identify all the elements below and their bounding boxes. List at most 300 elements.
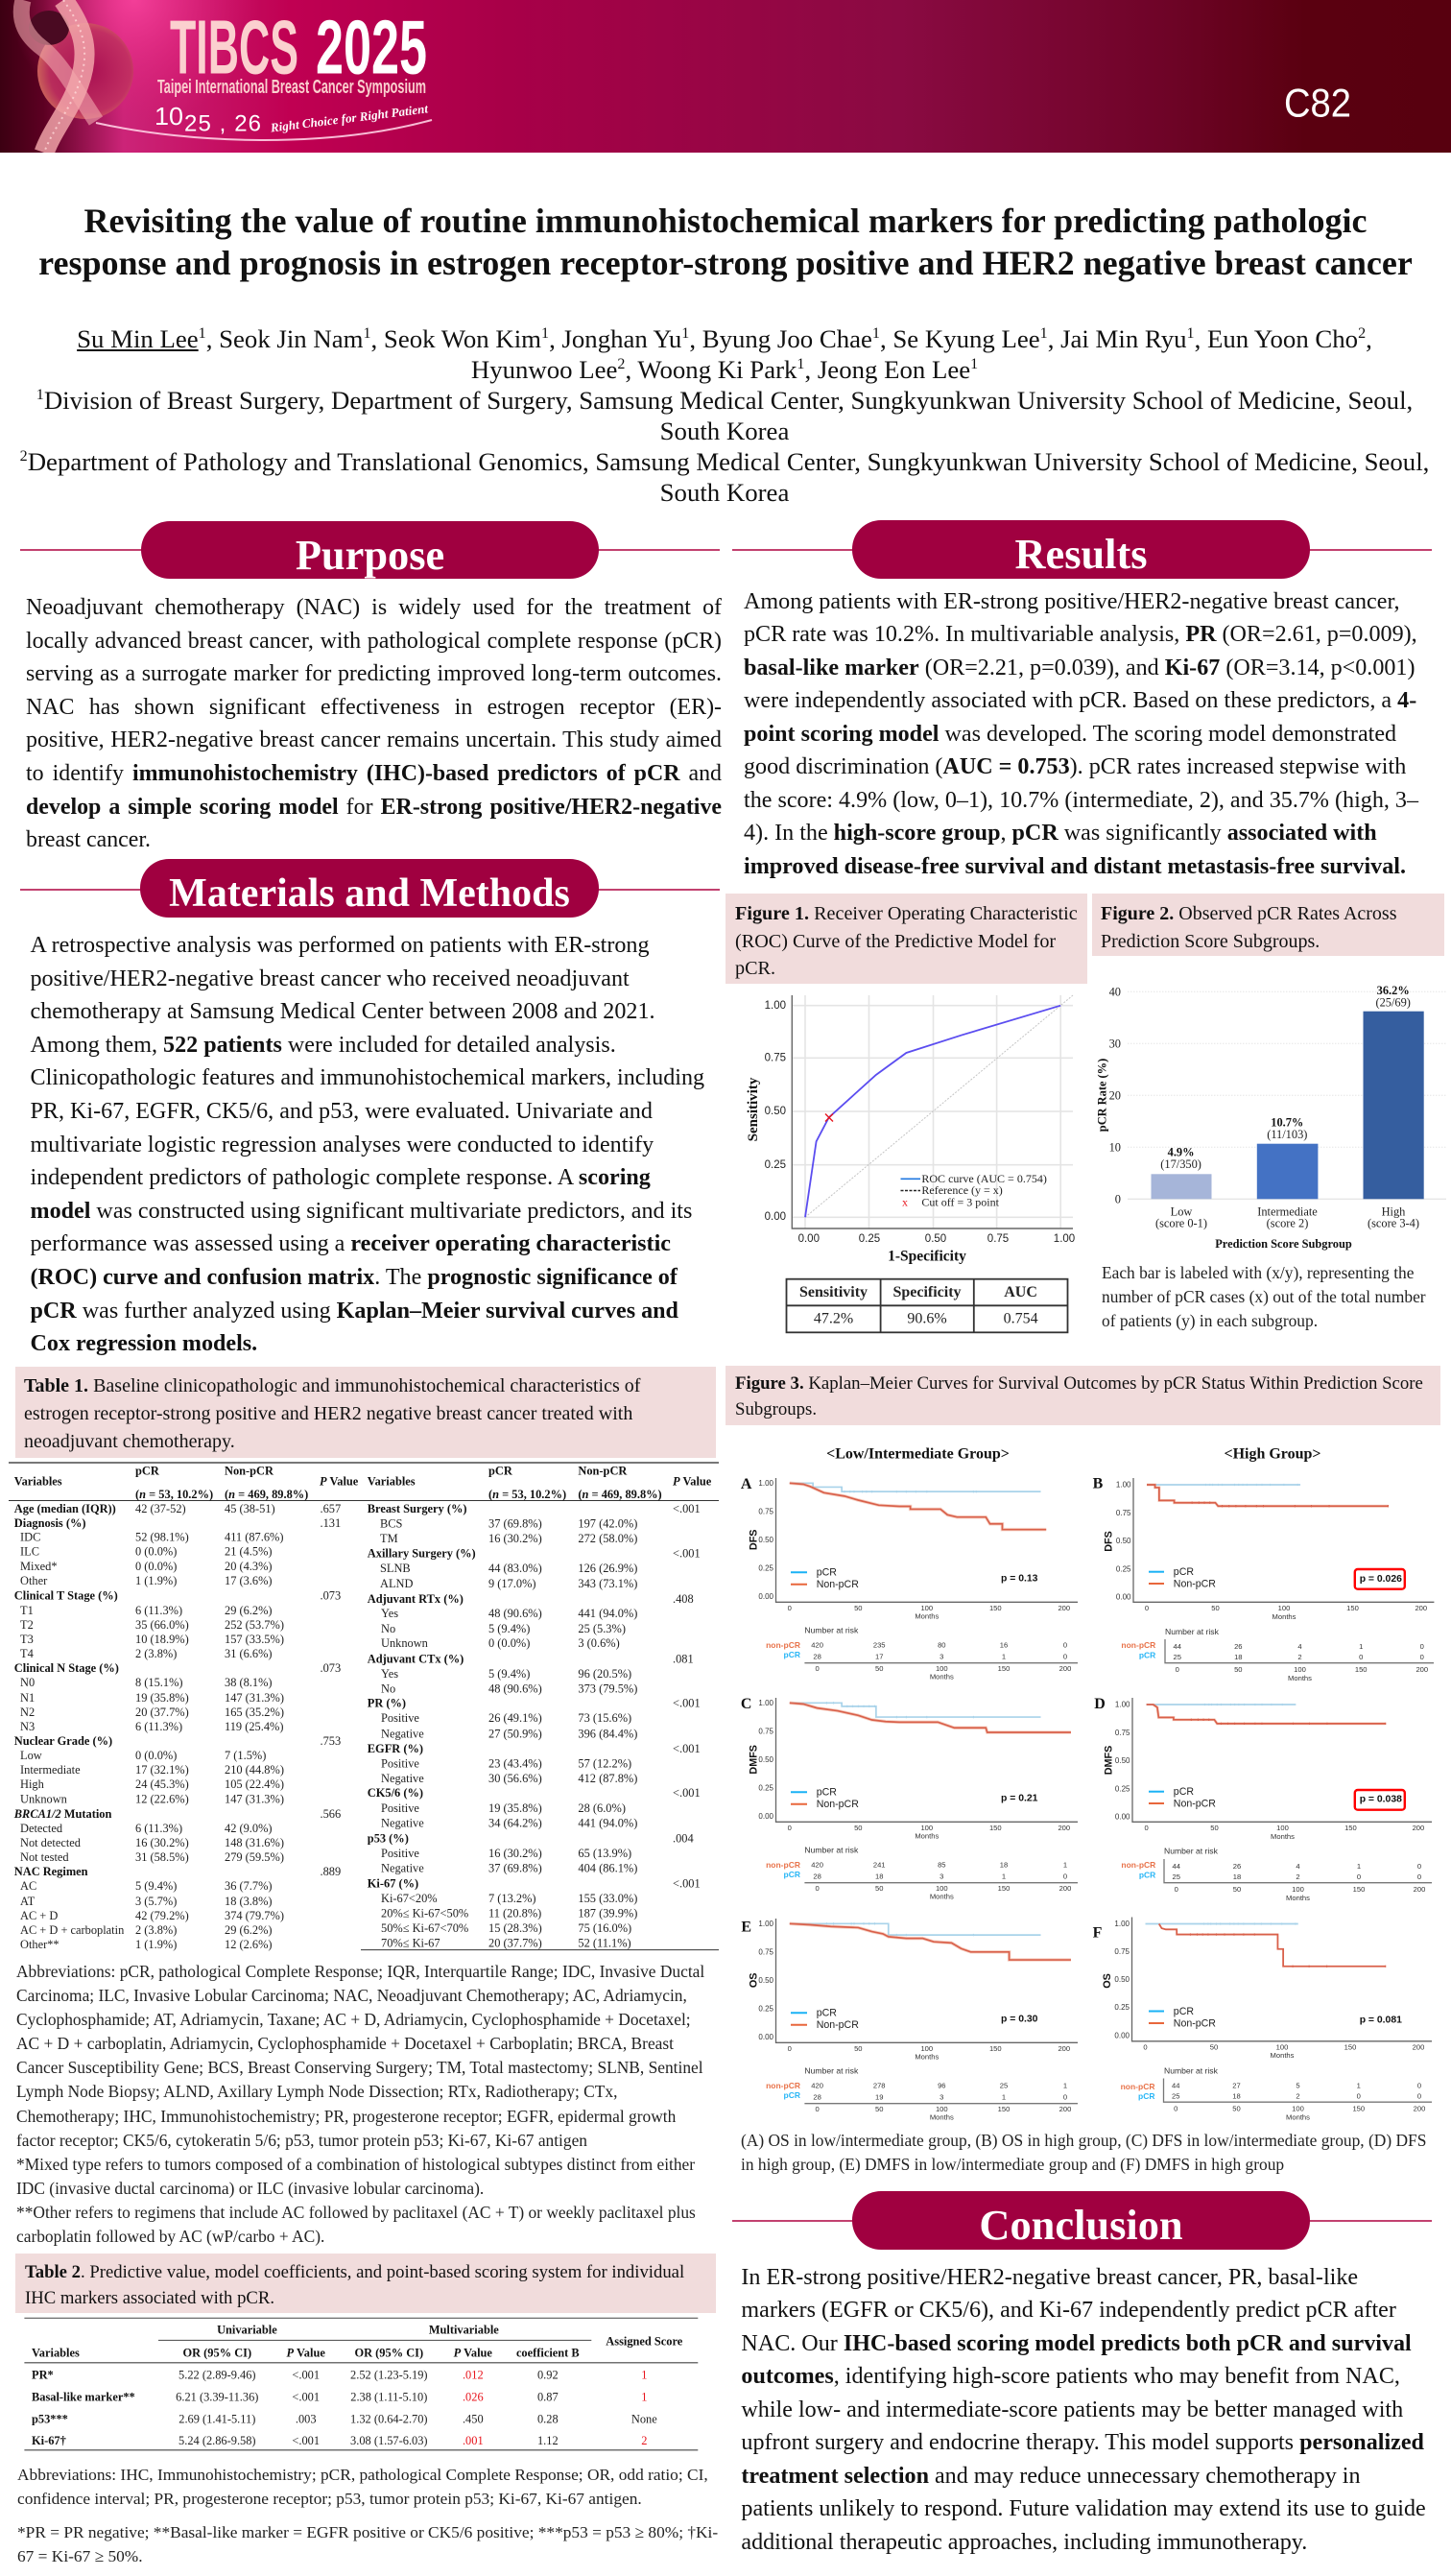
number at risk: non-pCR [766, 2081, 800, 2090]
number at risk: 200 [1059, 1664, 1071, 1673]
number at risk: 200 [1414, 2104, 1425, 2112]
number at risk: 278 [873, 2081, 886, 2090]
table 1: baseline characteristics: 9 (17.0%) [488, 1577, 536, 1590]
table 1: baseline characteristics: 44 (83.0%) [488, 1562, 542, 1575]
caption: Figure 3: Figure 3. Kaplan–Meier Curves for Survival Outcomes by pCR Status Within Prediction Score [735, 1373, 1423, 1394]
table 1: baseline characteristics: 6 (11.3%) [135, 1720, 182, 1733]
table 1: baseline characteristics: p53 (%) [368, 1831, 409, 1845]
table 1: baseline characteristics [9, 1463, 719, 1951]
table 1: baseline characteristics: AT [20, 1895, 36, 1908]
table 2: scoring system: Multivariable [429, 2324, 499, 2337]
number at risk: Months [1286, 1894, 1310, 1902]
number at risk: 44 [1172, 2081, 1179, 2090]
table 2: scoring system: 2.38 (1.11-5.10) [350, 2391, 427, 2404]
table 1: baseline characteristics: 57 (12.2%) [578, 1756, 631, 1770]
table 1: baseline characteristics: Intermediate [20, 1763, 81, 1777]
table 1: baseline characteristics: 374 (79.7%) [225, 1909, 284, 1922]
panel C: DMFS low/intermediate [741, 1696, 1078, 1900]
text: Results: 4). In the high-score group, pCR was significantly associated with [744, 821, 1377, 846]
chart: observed pCR rates: (11/103) [1267, 1128, 1307, 1141]
text: Purpose: to identify immunohistochemistry (IHC)-based predictors of pCR and [26, 761, 722, 786]
number at risk: 50 [875, 1884, 883, 1893]
panel E: OS low/intermediate: 150 [989, 2044, 1002, 2053]
table 1: baseline characteristics: Negative [381, 1862, 424, 1875]
panel D: DMFS high: 100 [1276, 1824, 1289, 1832]
text: Results: point scoring model was developed. The scoring model demonstrated [744, 722, 1396, 747]
table 1: baseline characteristics: N2 [20, 1705, 35, 1719]
table 1: baseline characteristics: ( [578, 1488, 583, 1501]
table 2: scoring system: p53*** [32, 2413, 68, 2426]
number at risk: Number at risk [1164, 1847, 1219, 1856]
text: Conclusion: upfront surgery and endocrine therapy. This model supports personalized [741, 2430, 1424, 2455]
text: Purpose: develop a simple scoring model for ER-strong positive/HER2-negative [26, 795, 722, 820]
panel A: DFS low/intermediate: 1.00 [758, 1479, 774, 1488]
caption: Table 2: Table 2. Predictive value, model coefficients, and point-based scoring system for individual [25, 2262, 684, 2282]
table 1: baseline characteristics: 272 (58.0%) [578, 1532, 637, 1545]
chart: observed pCR rates: 10 [1109, 1140, 1121, 1154]
text: Results: good discrimination (AUC = 0.753). pCR rates increased stepwise with [744, 754, 1406, 779]
number at risk: 19 [875, 2092, 883, 2102]
panel C: DMFS low/intermediate: 150 [989, 1824, 1002, 1832]
table 1: baseline characteristics: 65 (13.9%) [578, 1847, 631, 1860]
caption: Figure 1: pCR. [735, 958, 775, 979]
chart: ROC curve: 1.00 [765, 1000, 786, 1012]
chart: observed pCR rates: (score 3-4) [1368, 1217, 1419, 1230]
table 1: baseline characteristics: 25 (5.3%) [578, 1622, 626, 1635]
panel D: DMFS high: DMFS [1104, 1746, 1115, 1775]
legend [1149, 2006, 1216, 2029]
panel C: DMFS low/intermediate: 0.25 [758, 1783, 774, 1792]
table 1: baseline characteristics: Not tested [20, 1850, 69, 1864]
number at risk: Number at risk [804, 1626, 859, 1635]
number at risk: 200 [1415, 1665, 1428, 1674]
number at risk: 0 [1063, 1653, 1067, 1660]
number at risk: 0 [1174, 2104, 1177, 2112]
table 2: scoring system: 0.87 [537, 2391, 559, 2404]
panel B: DFS high: 0.75 [1116, 1509, 1131, 1517]
number at risk: 0 [815, 1884, 820, 1893]
text: Figure 2 note [1102, 1263, 1426, 1330]
table 1: baseline characteristics: Axillary Surgery (%) [368, 1547, 476, 1561]
text: Table 1 abbreviations: Chemotherapy; IHC, Immunohistochemistry; PR, progesterone receptor; EGFR, epidermal growth [16, 2107, 676, 2126]
text: Conclusion [979, 2201, 1183, 2249]
number at risk: 50 [1233, 1885, 1241, 1894]
caption: Figure 1: (ROC) Curve of the Predictive Model for [735, 931, 1056, 952]
number at risk: pCR [784, 1650, 800, 1659]
table 1: baseline characteristics: 0 (0.0%) [135, 1560, 177, 1573]
significant p value: p = 0.026 [1360, 1574, 1402, 1585]
chart: observed pCR rates: 0 [1115, 1192, 1121, 1205]
panel C: DMFS low/intermediate: 1.00 [758, 1699, 774, 1707]
panel F: OS high: 100 [1276, 2043, 1288, 2052]
number at risk: 27 [1232, 2081, 1241, 2090]
table 1: baseline characteristics: 19 (35.8%) [135, 1691, 189, 1705]
table 2: scoring system [24, 2318, 698, 2450]
number at risk: pCR [1139, 1650, 1155, 1659]
panel A: DFS low/intermediate: 0.25 [758, 1563, 774, 1572]
text: Conclusion: markers (EGFR or CK5/6), and Ki-67 independently predict pCR after [741, 2298, 1396, 2323]
caption: Table 1: Table 1. Baseline clinicopathologic and immunohistochemical characteristics of [24, 1375, 640, 1396]
number at risk [1121, 1627, 1434, 1682]
text: Conclusion: patients unlikely to respond. Future validation may extend its use to guide [741, 2496, 1426, 2521]
panel A: DFS low/intermediate: 150 [989, 1604, 1002, 1612]
table 1: baseline characteristics: Clinical T Stage (%) [14, 1589, 118, 1603]
table 1: baseline characteristics: 126 (26.9%) [578, 1562, 637, 1575]
authors and affiliations: 1Division of Breast Surgery, Department of Surgery, Samsung Medical Center, Sungkyunkwan University School of Medicine, Seoul, [36, 386, 1413, 415]
number at risk: 1 [1002, 1653, 1006, 1660]
number at risk [766, 1846, 1078, 1900]
table 2: scoring system: P Value [454, 2346, 492, 2359]
chart: observed pCR rates: 36.2% [1377, 984, 1410, 997]
text: Purpose: breast cancer. [26, 827, 151, 852]
legend: Non-pCR [817, 2019, 859, 2031]
number at risk: Number at risk [804, 2066, 859, 2076]
text: Figure 2 note: number of pCR cases (x) out of the total number [1102, 1287, 1426, 1306]
chart: observed pCR rates: 10.7% [1271, 1116, 1303, 1130]
table: ROC performance: 47.2% [814, 1311, 853, 1326]
text: Results: basal-like marker (OR=2.21, p=0.039), and Ki-67 (OR=3.14, p<0.001) [744, 656, 1415, 680]
number at risk: 0 [1357, 1872, 1361, 1881]
table 1: baseline characteristics: 50%≤ Ki-67<70% [381, 1921, 468, 1935]
title [38, 202, 1413, 282]
text: Table 2 footnote: *PR = PR negative; **Basal-like marker = EGFR positive or CK5/6 positive; ***p53 = p53 ≥ 80%; †Ki- [17, 2523, 718, 2541]
panel B: DFS high: 200 [1415, 1604, 1427, 1612]
chart: observed pCR rates: pCR Rate (%) [1095, 1059, 1108, 1132]
table 1: baseline characteristics: 105 (22.4%) [225, 1777, 284, 1791]
number at risk: 150 [1352, 2104, 1365, 2112]
icon: globe [37, 23, 133, 119]
significant p value [1355, 1790, 1405, 1810]
number at risk: 200 [1414, 1885, 1425, 1894]
text: Table 1 abbreviations [16, 1962, 704, 2246]
table 1: baseline characteristics: Positive [381, 1847, 419, 1860]
number at risk: 100 [1292, 2104, 1304, 2112]
number at risk: 28 [813, 1872, 821, 1881]
number at risk: 3 [940, 2092, 943, 2102]
panel C: DMFS low/intermediate: DMFS [749, 1745, 760, 1775]
table 1: baseline characteristics: Negative [381, 1772, 424, 1785]
table 2: scoring system: 1.12 [537, 2434, 559, 2447]
table 1: baseline characteristics: .004 [673, 1831, 694, 1845]
chart: ROC curve: 1-Specificity [888, 1248, 966, 1265]
table: ROC performance [787, 1279, 1067, 1332]
text: Figure 3 legend [741, 2131, 1426, 2174]
number at risk: Months [930, 2113, 954, 2121]
number at risk: 100 [1294, 1665, 1306, 1674]
number at risk [766, 1626, 1078, 1682]
table 1: baseline characteristics: n = 469, 89.8%) [583, 1488, 662, 1501]
table 1: baseline characteristics: 252 (53.7%) [225, 1618, 284, 1632]
logo text: 10 [155, 102, 183, 131]
table 1: baseline characteristics: Breast Surgery (%) [368, 1502, 467, 1515]
chart: ROC curve: 0.25 [765, 1159, 786, 1171]
table 1: baseline characteristics: 412 (87.8%) [578, 1772, 637, 1785]
number at risk: non-pCR [1121, 1640, 1155, 1650]
text: Table 1 abbreviations: IDC (invasive ductal carcinoma) or ILC (invasive lobular carcinoma). [16, 2179, 484, 2198]
caption: Figure 3 [726, 1366, 1440, 1425]
text: Conclusion: In ER-strong positive/HER2-negative breast cancer, PR, basal-like [741, 2265, 1358, 2290]
panel F: OS high [1093, 1918, 1432, 2122]
number at risk: 1 [1357, 2081, 1361, 2090]
number at risk: 200 [1059, 1884, 1071, 1893]
text: Table 2 footnote: 67 = Ki-67 ≥ 50%. [17, 2547, 143, 2565]
table 2: scoring system: 2.52 (1.23-5.19) [350, 2369, 428, 2382]
chart: ROC curve: 0.00 [798, 1233, 820, 1245]
text: Materials and Methods: A retrospective analysis was performed on patients with ER-strong [31, 933, 650, 958]
text: Purpose: positive, HER2-negative breast cancer remains uncertain. This study aimed [26, 727, 722, 752]
table 1: baseline characteristics: 0 (0.0%) [135, 1545, 177, 1559]
text: Results [744, 589, 1418, 879]
panel A: DFS low/intermediate: 50 [854, 1604, 863, 1612]
number at risk: non-pCR [766, 1860, 800, 1870]
number at risk: 18 [1233, 1872, 1241, 1881]
table 1: baseline characteristics: 37 (69.8%) [488, 1517, 542, 1531]
panel E: OS low/intermediate: OS [749, 1972, 760, 1988]
number at risk: 18 [1234, 1653, 1243, 1661]
panel E: OS low/intermediate: 0.50 [758, 1976, 774, 1985]
number at risk: Months [930, 1893, 954, 1900]
table 2: scoring system: <.001 [292, 2369, 320, 2382]
panel D: DMFS high: D [1094, 1696, 1106, 1712]
legend [791, 2008, 859, 2031]
number at risk: 0 [1357, 2092, 1361, 2101]
number at risk: 420 [811, 2081, 823, 2090]
table 1: baseline characteristics: 210 (44.8%) [225, 1763, 284, 1777]
table 1: baseline characteristics: 5 (9.4%) [488, 1622, 530, 1635]
panel F: OS high: 0.00 [1114, 2031, 1130, 2040]
caption: Table 2 [15, 2254, 716, 2313]
text: Results [1014, 530, 1148, 578]
table 1: baseline characteristics: 73 (15.6%) [578, 1711, 631, 1725]
text: Materials and Methods: chemotherapy at Samsung Medical Center between 2008 and 2021. [31, 999, 655, 1024]
legend [791, 1566, 859, 1590]
table 2: scoring system: Variables [32, 2346, 80, 2359]
panel C: DMFS low/intermediate: 0 [788, 1824, 792, 1832]
table 1: baseline characteristics: 29 (6.2%) [225, 1923, 273, 1937]
panel B: DFS high: Months [1273, 1612, 1296, 1621]
table 1: baseline characteristics: 10 (18.9%) [135, 1633, 189, 1646]
table 1: baseline characteristics: .889 [321, 1865, 341, 1878]
table 1: baseline characteristics: 75 (16.0%) [578, 1921, 631, 1935]
chart: ROC curve: 0.50 [925, 1233, 946, 1245]
text: Materials and Methods: performance was assessed using a receiver operating characteristic [31, 1231, 671, 1256]
number at risk: Number at risk [804, 1846, 859, 1855]
chart: observed pCR rates [1095, 984, 1446, 1251]
panel F: OS high: 200 [1413, 2043, 1424, 2052]
caption: Figure 2 [1092, 894, 1444, 956]
number at risk: 150 [998, 1664, 1010, 1673]
table 1: baseline characteristics: .566 [321, 1807, 341, 1821]
number at risk: 5 [1296, 2081, 1300, 2090]
legend [1149, 1566, 1216, 1589]
chart: ROC curve: 0.00 [765, 1211, 786, 1223]
number at risk: 2 [1297, 1653, 1302, 1661]
chart: observed pCR rates: Low [1171, 1205, 1192, 1218]
number at risk: 50 [1234, 1665, 1243, 1674]
table 1: baseline characteristics: 16 (30.2%) [135, 1836, 189, 1849]
panel D: DMFS high: 0.75 [1115, 1729, 1130, 1737]
ROC legend: Cut off = 3 point [921, 1195, 1000, 1208]
table 1: baseline characteristics: 48 (90.6%) [488, 1682, 542, 1695]
table 1: baseline characteristics: 1 (1.9%) [135, 1574, 177, 1587]
table 1: baseline characteristics: Adjuvant RTx (%) [368, 1592, 464, 1606]
table 1: baseline characteristics: T4 [20, 1647, 34, 1660]
panel E: OS low/intermediate [741, 1919, 1078, 2121]
text: Purpose: Neoadjuvant chemotherapy (NAC) is widely used for the treatment of [26, 595, 722, 620]
authors and affiliations: South Korea [660, 478, 789, 507]
text: Materials and Methods: Clinicopathologic features and immunohistochemical markers, including [31, 1065, 704, 1090]
number at risk: 150 [998, 2105, 1010, 2113]
table 1: baseline characteristics: 0 (0.0%) [488, 1636, 530, 1650]
table 1: baseline characteristics: Detected [20, 1822, 63, 1835]
swoosh [96, 120, 432, 140]
number at risk: 25 [1172, 1872, 1180, 1881]
table 1: baseline characteristics: <.001 [673, 1547, 701, 1561]
number at risk: Number at risk [1164, 2065, 1219, 2075]
table 1: baseline characteristics: .073 [321, 1589, 341, 1603]
number at risk: non-pCR [766, 1640, 800, 1650]
table 1: baseline characteristics: Ki-67 (%) [368, 1876, 418, 1890]
panel D: DMFS high: 1.00 [1115, 1701, 1130, 1708]
table 2: scoring system: 1 [641, 2391, 647, 2404]
panel E: OS low/intermediate: 1.00 [758, 1920, 774, 1928]
panel F: OS high: 1.00 [1114, 1920, 1130, 1928]
panel F: OS high: 0 [1143, 2043, 1148, 2052]
panel D: DMFS high [1094, 1696, 1432, 1902]
table 1: baseline characteristics: AC + D + carboplatin [20, 1923, 124, 1937]
table 1: baseline characteristics: Other** [20, 1938, 59, 1951]
panel D: DMFS high: 200 [1413, 1824, 1424, 1832]
logo text [155, 4, 429, 136]
table 1: baseline characteristics: 20 (4.3%) [225, 1560, 273, 1573]
title: Revisiting the value of routine immunohistochemical markers for predicting pathologic [84, 202, 1367, 240]
table 1: baseline characteristics: No [381, 1622, 395, 1635]
logo text: 25 , 26 [184, 111, 261, 136]
table 1: baseline characteristics: 20%≤ Ki-67<50% [381, 1906, 468, 1920]
table 1: baseline characteristics: Age (median (IQR)) [14, 1502, 116, 1515]
panel E: OS low/intermediate: 200 [1058, 2044, 1070, 2053]
table 2: scoring system: 1.32 (0.64-2.70) [350, 2413, 428, 2426]
table 1: baseline characteristics: 52 (11.1%) [578, 1937, 631, 1950]
legend [791, 1787, 859, 1810]
text: Table 1 abbreviations: Cyclophosphamide; AT, Adriamycin, Taxane; AC + D, Adriamycin, Cyclophosphamide + Docetaxel; [16, 2010, 691, 2029]
table 2: scoring system: .450 [463, 2413, 484, 2426]
table 1: baseline characteristics: ILC [20, 1545, 39, 1559]
number at risk: 50 [1232, 2104, 1241, 2112]
poster number: C82 [1284, 81, 1351, 125]
text: Results: the score: 4.9% (low, 0–1), 10.7% (intermediate, 2), and 35.7% (high, 3– [744, 788, 1418, 813]
table 1: baseline characteristics: 17 (32.1%) [135, 1763, 189, 1777]
table 1: baseline characteristics: 396 (84.4%) [578, 1727, 637, 1740]
text: Table 2 abbreviations [17, 2466, 708, 2508]
legend: pCR [1174, 2006, 1194, 2017]
chart: ROC curve [746, 995, 1075, 1265]
number at risk: 0 [1417, 2081, 1421, 2090]
text: Table 1 abbreviations: Abbreviations: pCR, pathological Complete Response; IQR, Interquartile Range; IDC, Invasive Ductal [16, 1962, 704, 1981]
text: Table 1 abbreviations: Lymph Node Biopsy; ALND, Axillary Lymph Node Dissection; RTx, Radiotherapy; CTx, [16, 2082, 617, 2101]
number at risk: 17 [875, 1653, 883, 1660]
table 1: baseline characteristics: 42 (9.0%) [225, 1822, 273, 1835]
text: Table 1 abbreviations: Carcinoma; ILC, Invasive Lobular Carcinoma; NAC, Neoadjuvant Chemotherapy; AC, Adriamycin, [16, 1986, 687, 2005]
text: Conclusion [741, 2265, 1426, 2555]
panel E: OS low/intermediate: 0.75 [758, 1947, 774, 1956]
table 1: baseline characteristics: ( [488, 1488, 492, 1501]
panel B: DFS high: B [1093, 1476, 1104, 1491]
legend: Non-pCR [817, 1799, 859, 1810]
table 1: baseline characteristics: 441 (94.0%) [578, 1817, 637, 1830]
number at risk: 85 [938, 1860, 946, 1870]
table 1: baseline characteristics: 373 (79.5%) [578, 1682, 637, 1695]
number at risk: 25 [1000, 2081, 1008, 2090]
table 2: scoring system: OR (95% CI) [183, 2346, 251, 2359]
number at risk: 0 [815, 1664, 820, 1673]
table 1: baseline characteristics: 45 (38-51) [225, 1502, 275, 1515]
table 2: scoring system: P Value [287, 2346, 325, 2359]
text: Conclusion: additional therapeutic approaches, including immunotherapy. [741, 2530, 1307, 2555]
table 1: baseline characteristics: .657 [321, 1502, 341, 1515]
table 1: baseline characteristics: P [320, 1475, 327, 1489]
table 1: baseline characteristics: ( [225, 1488, 228, 1501]
table 1: baseline characteristics: Clinical N Stage (%) [14, 1661, 119, 1675]
number at risk: 96 [938, 2081, 946, 2090]
number at risk: 100 [936, 1664, 948, 1673]
panel E: OS low/intermediate: 50 [854, 2044, 863, 2053]
bar: high [1363, 1012, 1424, 1199]
number at risk: 0 [1063, 1641, 1067, 1649]
table 1: baseline characteristics: AC [20, 1879, 36, 1893]
table 1: baseline characteristics: 6 (11.3%) [135, 1604, 182, 1617]
table 2: scoring system: PR* [32, 2369, 54, 2382]
table 2: scoring system: Assigned Score [606, 2335, 683, 2349]
table 1: baseline characteristics: .408 [673, 1592, 694, 1606]
chart: observed pCR rates: Prediction Score Subgroup [1215, 1237, 1352, 1251]
caption: Figure 3: Subgroups. [735, 1399, 817, 1419]
table 1: baseline characteristics: 42 (79.2%) [135, 1909, 189, 1922]
caption: Figure 2: Figure 2. Observed pCR Rates Across [1101, 903, 1397, 924]
panel E: OS low/intermediate: E [741, 1920, 751, 1935]
table 2: scoring system: 0.92 [537, 2369, 559, 2382]
panel E: OS low/intermediate: Months [915, 2052, 939, 2062]
number at risk: pCR [784, 1870, 800, 1879]
table 1: baseline characteristics: BCS [380, 1517, 403, 1531]
table: ROC performance: Specificity [892, 1284, 962, 1300]
panel B: DFS high [1093, 1476, 1434, 1682]
table 1: baseline characteristics: 31 (58.5%) [135, 1850, 189, 1864]
panel A: DFS low/intermediate: 100 [920, 1604, 933, 1612]
legend: pCR [817, 1787, 837, 1799]
text: Table 1 abbreviations: factor receptor; CK5/6, cytokeratin 5/6; p53, tumor protein p53; Ki-67, Ki-67 antigen [16, 2131, 587, 2150]
table 1: baseline characteristics: N1 [20, 1691, 35, 1705]
authors and affiliations [20, 324, 1429, 507]
significant p value [1355, 1569, 1405, 1589]
table 1: baseline characteristics: Non-pCR [578, 1464, 628, 1477]
table 2: scoring system: 6.21 (3.39-11.36) [176, 2391, 258, 2404]
table 2: scoring system: 3.08 (1.57-6.03) [350, 2434, 428, 2447]
ROC legend: Reference (y = x) [921, 1183, 1003, 1197]
text: Table 2 footnote [17, 2523, 718, 2565]
panel B: DFS high: 100 [1278, 1604, 1290, 1612]
table 1: baseline characteristics: 36 (7.7%) [225, 1879, 273, 1893]
text: Materials and Methods: pCR was further analyzed using Kaplan–Meier survival curves and [31, 1299, 678, 1324]
table 1: baseline characteristics: <.001 [673, 1742, 701, 1755]
table 1: baseline characteristics: 27 (50.9%) [488, 1727, 542, 1740]
table 2: scoring system: 1 [641, 2369, 647, 2382]
number at risk: Months [1286, 2113, 1310, 2122]
panel A: DFS low/intermediate: 0.00 [758, 1592, 774, 1601]
number at risk: 100 [936, 1884, 948, 1893]
panel E: OS low/intermediate: 100 [920, 2044, 933, 2053]
table 1: baseline characteristics: 7 (1.5%) [225, 1749, 266, 1762]
